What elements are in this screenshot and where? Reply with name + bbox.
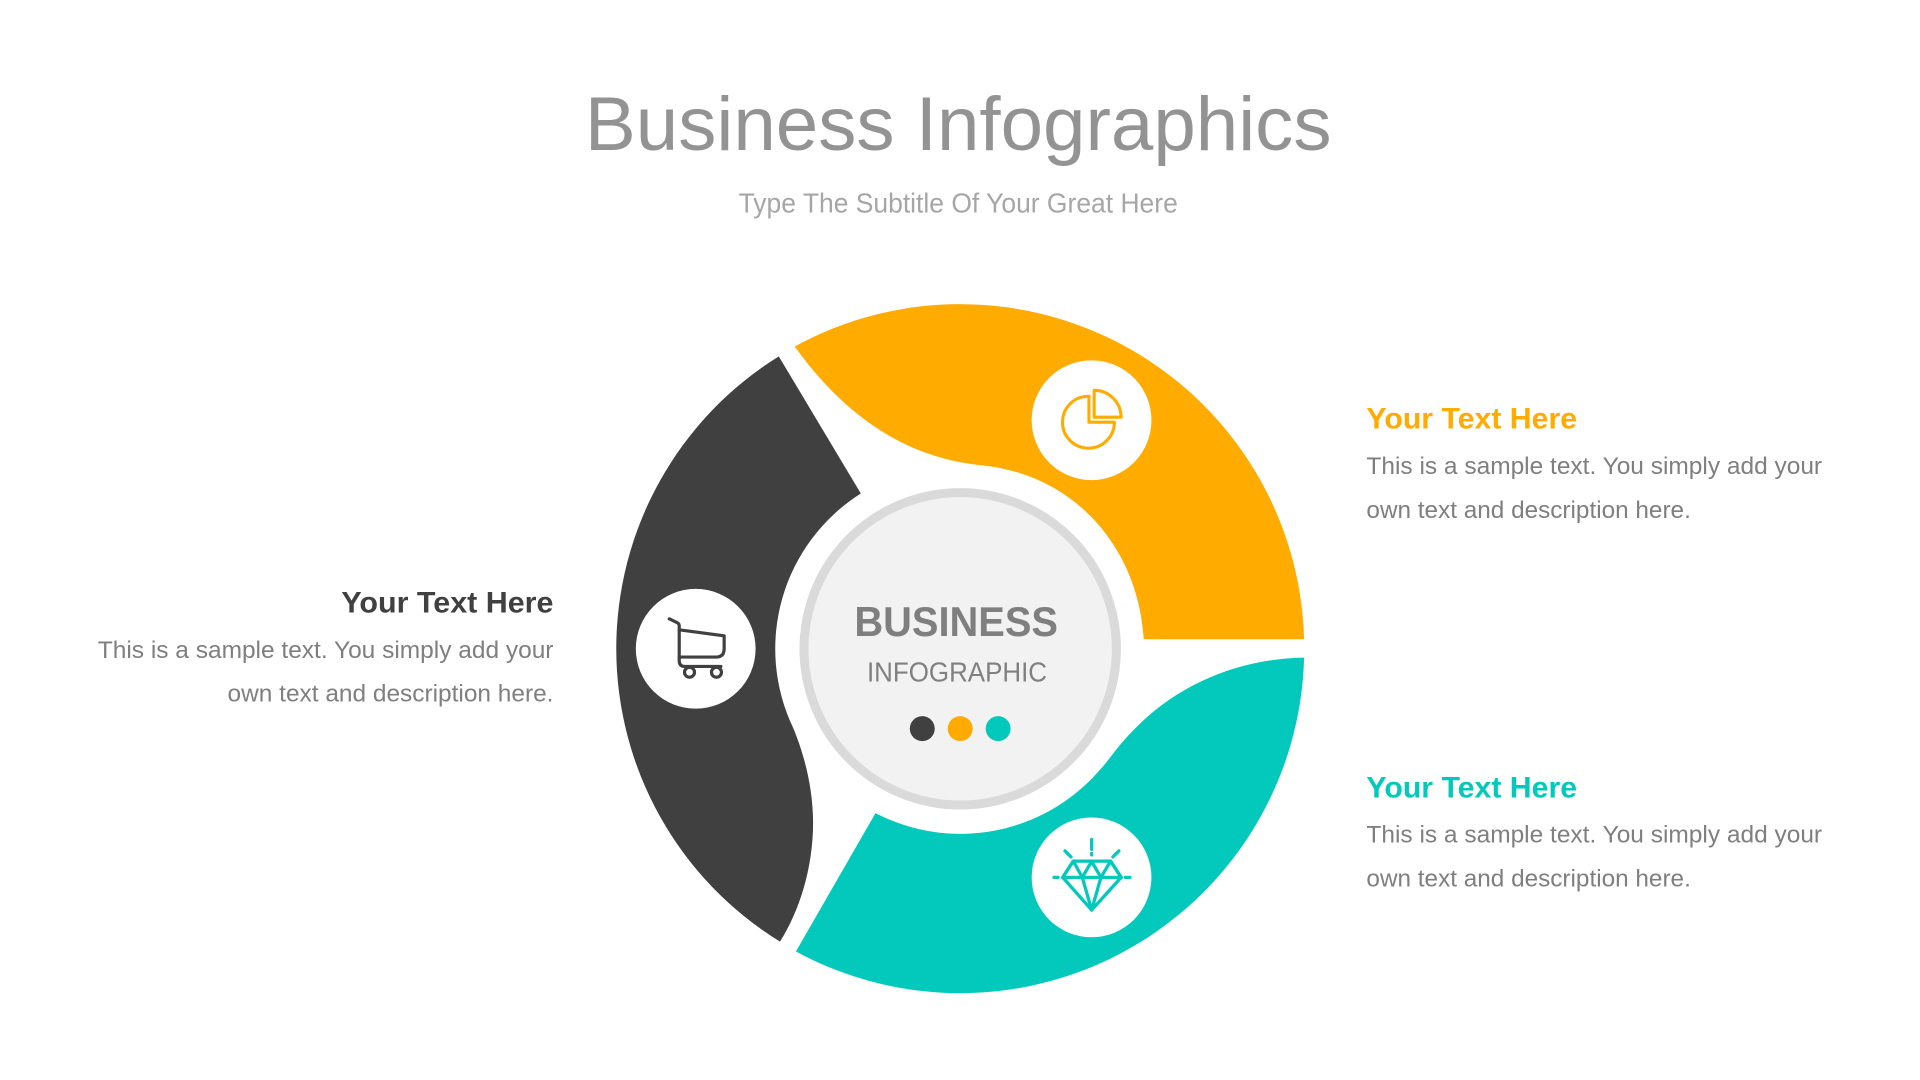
subtitle: Type The Subtitle Of Your Great Here xyxy=(739,187,1178,218)
icon: shopping cart xyxy=(636,589,756,709)
body line 1: This is a sample text. You simply add your xyxy=(1366,821,1822,848)
orange segment xyxy=(795,304,1304,639)
text block: dark xyxy=(98,586,553,708)
body line 2: own text and description here. xyxy=(228,681,553,708)
dark dot xyxy=(910,716,935,741)
dark segment xyxy=(616,356,861,942)
center subheading: INFOGRAPHIC xyxy=(867,657,1047,688)
teal dot xyxy=(986,716,1011,741)
teal segment xyxy=(796,658,1304,993)
heading: Your Text Here xyxy=(341,586,553,619)
icon: diamond xyxy=(1032,817,1151,937)
body line 1: This is a sample text. You simply add your xyxy=(98,637,553,664)
panel: circular diagram xyxy=(616,304,1304,993)
body line 2: own text and description here. xyxy=(1366,865,1691,892)
orange dot xyxy=(948,716,973,741)
text block: orange xyxy=(1366,402,1822,524)
center heading: BUSINESS xyxy=(854,598,1058,645)
body line 1: This is a sample text. You simply add your xyxy=(1366,453,1822,480)
title: Business Infographics xyxy=(585,82,1332,167)
heading: Your Text Here xyxy=(1366,402,1577,435)
heading: Your Text Here xyxy=(1366,772,1577,805)
text block: teal xyxy=(1366,772,1822,892)
icon: pie chart xyxy=(1032,360,1151,480)
body line 2: own text and description here. xyxy=(1366,497,1691,524)
center circle xyxy=(804,493,1116,805)
